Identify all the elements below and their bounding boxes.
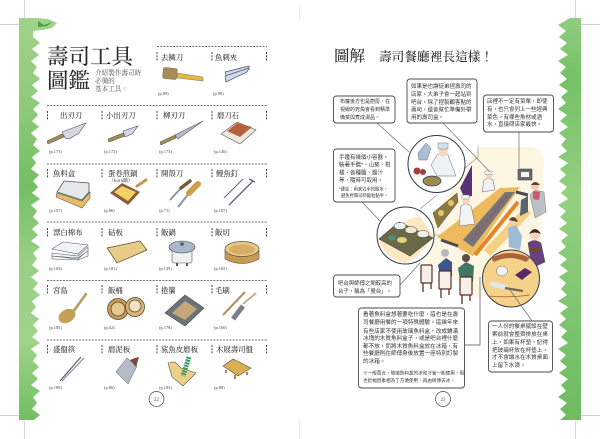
tool labels: 魚刺夾 — [215, 53, 238, 62]
callout: menu: 有，也只會列上一些經典 — [487, 105, 548, 113]
tool labels: 毛刷 — [215, 286, 230, 295]
page number 23: 23 — [440, 398, 446, 403]
callout: apprentice at counter: 壽司，還會幫忙準備外帶 — [411, 106, 472, 114]
callout: condiment containers: 等，隨時可取用。 — [339, 176, 383, 184]
subtitle text: 必備的 — [95, 76, 115, 85]
page references: (p.86) — [104, 208, 115, 213]
callout: condiment containers: 手邊有幾個小容器， — [339, 153, 389, 161]
page references: (p.178) — [159, 325, 172, 330]
callout: apprentice at counter: 吧台，除了捏製顧客點的 — [411, 98, 472, 106]
callout: apprentice at counter: 店家，大弟子會一起站到 — [411, 90, 472, 98]
callout: stage counter: 台子，稱為「覺台」。 — [338, 287, 392, 295]
callout: fish case: 司餐廳用餐的一項特殊體驗。這幾年來 — [363, 318, 459, 326]
tool grid dashed lines — [47, 46, 267, 354]
callout: apprentice at counter: 用的壽司盒。 — [411, 113, 444, 121]
callout: condiment containers: *譯註：用來沾手的醋水， — [339, 186, 388, 192]
icon: eel pins — [224, 179, 255, 205]
page references: (p.71) — [159, 208, 170, 213]
page references: (p.88) — [214, 385, 225, 390]
tool labels: 魚料盒 — [53, 169, 76, 178]
page references: (p.160) — [214, 325, 227, 330]
callout: place setting: 把玻璃杯放在杯墊上， — [492, 346, 548, 354]
icon: deba knife — [47, 123, 86, 144]
page references: (p.189) — [49, 385, 62, 390]
tool labels: 鰻魚釘 — [216, 169, 239, 178]
callout: fish case — [358, 308, 464, 388]
page references: (p.104) — [49, 266, 62, 271]
callout: apprentice at counter — [407, 79, 477, 123]
icon: rice tub — [225, 242, 259, 264]
page references: (p.173) — [159, 149, 172, 154]
icon: bleached cotton cloth — [52, 242, 88, 260]
icon: cutting board — [107, 241, 147, 263]
menu sign — [518, 169, 532, 180]
tool labels: 小出刃刀 — [106, 111, 136, 120]
tool labels: 盛盤筷 — [53, 345, 76, 354]
tool labels: 漂白棉布 — [53, 228, 83, 237]
callout: fish case: 看著魚料盒想著要吃什麼，這也是在壽 — [363, 310, 459, 318]
callout: stage counter — [334, 275, 400, 297]
tool labels: 木屐壽司盤 — [216, 345, 254, 354]
heading: diagram: 壽司餐廳裡長這樣！ — [379, 49, 493, 64]
icon: fish case — [56, 181, 90, 208]
wall lines — [420, 146, 478, 235]
tool labels: 出刃刀 — [60, 111, 82, 120]
callout: fish case: 的冰箱。 — [363, 357, 385, 365]
inset circle: condiment tray — [377, 207, 434, 264]
callout: place setting: 一人份的餐桌擺設在壁 — [492, 322, 548, 330]
page references: (p.146) — [214, 149, 227, 154]
tool icons — [47, 66, 259, 386]
icon: sharkskin grater — [168, 357, 196, 386]
callout: place setting: 上，如果有杯墊，記得 — [492, 338, 548, 346]
tool labels: 柳刃刀 — [163, 111, 185, 120]
callout: apprentice at counter: 如果是也讓徒弟捏壽司的 — [411, 82, 472, 90]
tool labels — [53, 53, 254, 354]
page references: (p.172) — [104, 149, 117, 154]
tool labels: 飯桶 — [108, 286, 123, 295]
tool labels: 鯊魚皮磨板 — [161, 345, 199, 354]
second chef — [482, 171, 495, 192]
page number 22 — [149, 392, 164, 406]
callout: fish case: ※一般而言，玻璃魚料盒的冰和冷會一起使用，但 — [363, 370, 464, 376]
purple banner — [460, 165, 472, 197]
tool labels: 開殼刀 — [161, 169, 183, 178]
callout: menu: 水，直接問店家最快。 — [487, 120, 542, 128]
subtitle text — [95, 68, 142, 93]
callout: place setting: 才不會讓水在木質桌面 — [492, 353, 548, 361]
callout: kitchen behind curtain: 視線的死角會看到精準 — [340, 106, 390, 113]
page references: (p.165) — [214, 266, 227, 271]
icon: scale remover — [162, 67, 203, 81]
icon: rice containers — [108, 298, 144, 320]
icon: whetstone — [221, 122, 256, 144]
head chef — [459, 195, 475, 226]
callout: place setting: 上留下水漬。 — [492, 361, 526, 369]
subtitle text: 介紹製作壽司時 — [95, 68, 142, 77]
callout: fish case: 些餐廳則在師傅身後放置一座特別訂製 — [363, 349, 459, 357]
callout: fish case: 都不放，而將木質魚料盒放在冰箱，有 — [363, 342, 459, 350]
tool labels: 磨泥板 — [108, 345, 131, 354]
page references — [49, 91, 227, 390]
icon: grater — [116, 357, 139, 384]
callout: place setting: 案前就會整齊排放在桌 — [492, 330, 548, 338]
page references: (p.86) — [104, 385, 115, 390]
heading: diagram: 圖解 — [334, 47, 366, 65]
icon: geta sushi tray — [223, 359, 251, 379]
icon: omelette pan — [110, 180, 146, 205]
page references: (p.62) — [104, 325, 115, 330]
tool labels: 磨刀石 — [217, 111, 240, 120]
callout: kitchen behind curtain: 布簾後方也是廚房，在 — [340, 98, 390, 105]
page references: (p.173) — [49, 149, 62, 154]
icon: rice paddle — [56, 294, 86, 326]
callout: stage counter: 吧台與師傅之間較高的 — [338, 279, 392, 287]
lower customers and chairs — [421, 249, 474, 304]
title: sushi tools guide: 圖鑑 — [47, 69, 91, 93]
page references: (p.89) — [158, 91, 169, 96]
tool labels: 宮島 — [53, 286, 68, 295]
tool labels: 蛋卷煎鍋 — [108, 169, 138, 178]
icon: bamboo mat — [165, 295, 204, 326]
callout connector lines — [362, 123, 532, 345]
tool labels: 飯鍋 — [161, 228, 176, 237]
callout: menu: 菜色。有哪些魚材或酒 — [487, 113, 543, 121]
icon: small deba knife — [108, 126, 138, 142]
title: sushi tools guide: 壽司工具 — [47, 45, 135, 69]
tool labels: （kora鍋） — [109, 177, 133, 184]
restaurant illustration — [377, 136, 546, 307]
inset circle: place setting — [482, 250, 540, 307]
callout: condiment containers: 裝著手醋*、山葵、柑 — [339, 160, 391, 168]
callout: fish case: 有些店家不使用玻璃魚料盒，改成鋪滿 — [363, 327, 459, 335]
icon: rice cooker — [169, 241, 195, 266]
page references: (p.157) — [49, 208, 62, 213]
page references: (p.183) — [159, 385, 172, 390]
icon: yanagiba knife — [160, 121, 203, 145]
callout: place setting — [488, 321, 552, 372]
tool labels: 砧板 — [108, 228, 123, 237]
callout: fish case: 冰塊的木質魚料盒子，或是吧台裡什麼 — [363, 334, 459, 342]
inset circle: chef with condiments — [408, 136, 465, 192]
tool labels: 飯切 — [215, 228, 230, 237]
callout: menu — [484, 95, 554, 132]
page references: (p.185) — [49, 325, 62, 330]
title: sushi tools guide — [47, 45, 135, 93]
page references: (p.181) — [104, 266, 117, 271]
callout: condiment containers: 橘、各種鹽、醬汁 — [339, 168, 384, 176]
icon: brushes — [223, 292, 256, 319]
right grass border — [558, 18, 581, 420]
heading: diagram — [334, 47, 493, 65]
page references: (p.187) — [214, 208, 227, 213]
page references: (p.98) — [213, 91, 224, 96]
page number 23 — [436, 392, 450, 406]
wall paintings — [433, 193, 458, 228]
callout: condiment containers — [334, 149, 395, 202]
left grass border — [19, 18, 57, 420]
callout: menu: 店裡不一定有菜單，即使 — [487, 97, 548, 105]
right customers — [508, 182, 546, 250]
callout: fish case: 也近幅因素相為了方便使用，再由師傅去冰。 — [363, 377, 455, 384]
callout: kitchen behind curtain — [334, 96, 395, 123]
counter — [437, 187, 528, 256]
cream floor — [400, 147, 544, 300]
icon: fish bone tweezers — [225, 66, 249, 82]
subtitle text: 基本工具。 — [95, 84, 128, 93]
callout: kitchen behind curtain: 備菜與煮成湯品。 — [340, 114, 380, 121]
callout: condiment containers: 避免捏壽司時飯粒黏手。 — [341, 192, 388, 199]
tool labels: 去鱗刀 — [161, 53, 183, 62]
page references: (p.139) — [159, 266, 172, 271]
tool labels: 捲簾 — [161, 286, 176, 295]
icon: plating chopsticks — [60, 357, 84, 381]
page number 22: 22 — [154, 398, 160, 403]
icon: shell knives — [170, 181, 198, 207]
waitress — [528, 229, 545, 268]
